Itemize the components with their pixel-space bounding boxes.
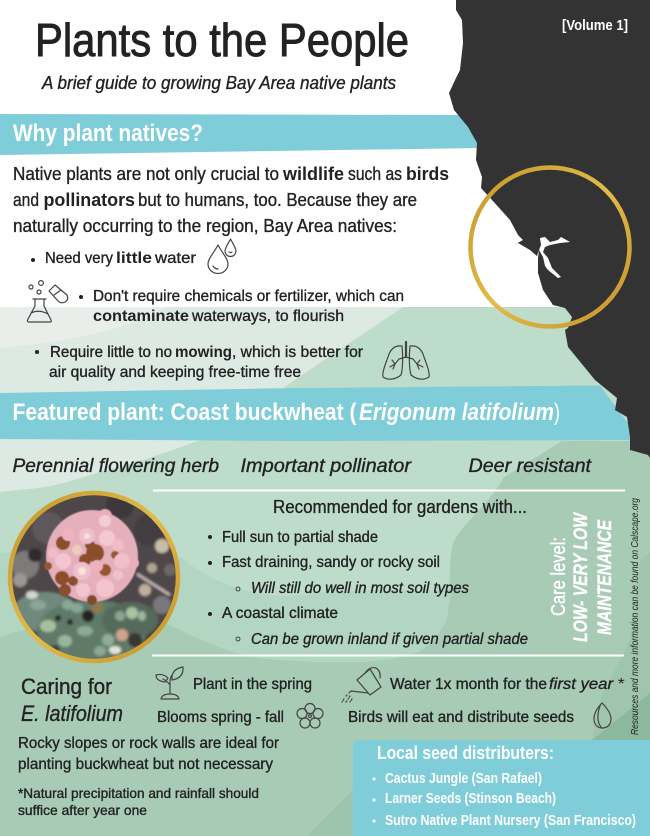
- recommended gardens list: Will still do well in most soil types: [251, 580, 469, 597]
- map: white San Francisco Bay: [537, 237, 570, 278]
- seed heading: Local seed distributers:: [377, 742, 554, 763]
- bullet: mowing: Require little to no: [50, 344, 172, 361]
- care level vertical label: MAINTENANCE: [595, 519, 616, 635]
- footnote: *Natural precipitation and rainfall should: [18, 785, 259, 801]
- recommended gardens list: Full sun to partial shade: [222, 529, 378, 546]
- icon: lungs: [383, 342, 429, 379]
- heading: featured plant: Erigonum latifolium: [359, 399, 554, 426]
- intro paragraph: birds: [406, 163, 449, 184]
- caring text: planting buckwheat but not necessary: [18, 756, 273, 773]
- intro paragraph: [13, 163, 449, 236]
- seed list: [372, 771, 636, 829]
- panel: local seed distributers: [353, 740, 650, 836]
- bullet: chemicals: contaminate: [93, 308, 189, 325]
- vertical resources note: Resources and more information can be found on Calscape.org: [630, 498, 641, 735]
- icon: water drops: [208, 239, 236, 274]
- care level vertical label: Care level:: [548, 537, 570, 616]
- photo: coast buckwheat flower in gold ring: [8, 490, 180, 665]
- care level vertical label: LOW- VERY LOW: [571, 511, 592, 642]
- bullet: little water: water: [154, 250, 197, 267]
- divider top: [153, 490, 625, 492]
- care: watering: first year: [549, 676, 614, 693]
- icon: seedling: [156, 667, 183, 699]
- gold ring around bay area: [470, 168, 630, 326]
- intro paragraph: but to humans, too. Because they are: [138, 189, 417, 210]
- caring heading: Caring for: [21, 674, 112, 699]
- care: watering: [390, 676, 625, 693]
- intro paragraph: pollinators: [44, 189, 135, 210]
- icon: watering can: [342, 668, 381, 703]
- recommended gardens list: [208, 497, 528, 648]
- caring heading: E. latifolium: [21, 701, 123, 726]
- intro paragraph: wildlife: [282, 163, 344, 184]
- recommended gardens list: Fast draining, sandy or rocky soil: [222, 554, 440, 571]
- heading: featured plant: Featured plant: Coast buckwheat (: [12, 399, 356, 426]
- heading: featured plant: ): [554, 399, 560, 426]
- bullet: little water: [31, 250, 197, 267]
- caring text: Rocky slopes or rock walls are ideal for: [18, 735, 280, 752]
- bullet: chemicals: Don't require chemicals or fertilizer, which can: [93, 288, 404, 305]
- bullet: chemicals: [79, 288, 404, 325]
- icon: flower: [297, 704, 323, 728]
- care level vertical label: [548, 511, 616, 642]
- seed list: Larner Seeds (Stinson Beach): [385, 791, 556, 807]
- bullet: chemicals: waterways, to flourish: [191, 308, 344, 325]
- footnote: suffice after year one: [18, 802, 147, 818]
- volume label: [Volume 1]: [562, 17, 628, 34]
- divider bottom: [152, 654, 624, 656]
- intro paragraph: and: [13, 189, 39, 210]
- banner: why plant natives: [0, 114, 480, 155]
- plant traits row: Perennial flowering herb: [12, 456, 219, 477]
- plant traits row: Deer resistant: [468, 456, 592, 477]
- footnote: [18, 785, 259, 818]
- map: dark California coast: [449, 0, 650, 458]
- bullet: little water: little: [116, 250, 152, 267]
- icon: seed: [594, 703, 611, 728]
- intro paragraph: Native plants are not only crucial to: [13, 163, 279, 184]
- intro paragraph: such as: [348, 163, 402, 184]
- caring text: [18, 735, 280, 773]
- recommended gardens list: Recommended for gardens with...: [273, 497, 527, 517]
- plant traits row: [12, 456, 592, 477]
- care: watering: *: [617, 676, 625, 693]
- recommended gardens list: A coastal climate: [222, 605, 338, 622]
- heading: why plant natives: Why plant natives?: [13, 120, 203, 147]
- subtitle: A brief guide to growing Bay Area native plants: [41, 73, 396, 93]
- care: watering: Water 1x month for the: [390, 676, 547, 693]
- banner: featured plant: [0, 386, 640, 441]
- seed list: Cactus Jungle (San Rafael): [385, 771, 542, 787]
- recommended gardens list: Can be grown inland if given partial shade: [251, 631, 528, 648]
- icon: chemistry flask: [27, 281, 68, 322]
- title: Plants to the People: [35, 14, 409, 66]
- bullet: little water: Need very: [45, 250, 113, 267]
- caring heading: [21, 674, 123, 726]
- bullet: mowing: mowing: [175, 344, 232, 361]
- intro paragraph: naturally occurring to the region, Bay Area natives:: [13, 215, 397, 236]
- care: blooms: Blooms spring - fall: [157, 709, 284, 726]
- bullet: mowing: , which is better for: [232, 344, 364, 361]
- plant traits row: Important pollinator: [240, 456, 412, 477]
- bullet: mowing: air quality and keeping free-time free: [49, 364, 301, 381]
- care: plant in spring: Plant in the spring: [193, 676, 312, 693]
- bullet: mowing: [35, 344, 364, 381]
- care: birds: Birds will eat and distribute seeds: [348, 709, 574, 726]
